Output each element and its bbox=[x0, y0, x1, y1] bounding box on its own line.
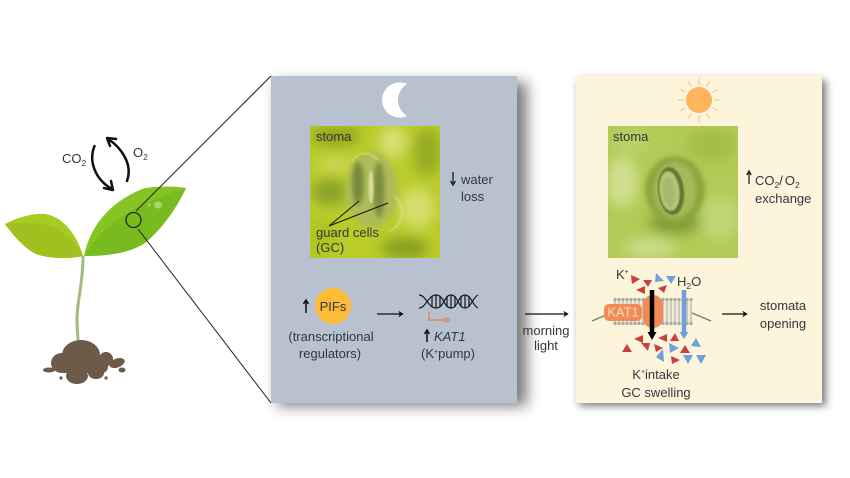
label: stoma: stoma bbox=[613, 129, 649, 144]
label: K+ intake, GC swelling: intake bbox=[645, 367, 680, 382]
label: H2O: O bbox=[691, 274, 701, 289]
PIFs group: regulators) bbox=[299, 346, 361, 361]
arrow: morning light bbox=[525, 313, 568, 315]
potassium arrow bbox=[650, 290, 654, 333]
effect: CO2/O2 exchange: CO bbox=[755, 173, 774, 188]
label: K+: K bbox=[616, 267, 625, 282]
label: K+: + bbox=[625, 269, 629, 276]
label: K+ intake, GC swelling: K bbox=[632, 367, 641, 382]
effect: CO2/O2 exchange: 2 bbox=[795, 180, 800, 190]
water molecules bbox=[655, 273, 706, 364]
soil mound bbox=[43, 340, 126, 384]
channel bbox=[643, 295, 663, 328]
lipid bilayer bbox=[613, 300, 692, 324]
effect: CO2/O2 exchange: exchange bbox=[755, 191, 811, 206]
icon: transcription arrow bbox=[429, 312, 449, 322]
label: guard cells: (GC) bbox=[316, 240, 344, 255]
PIFs group bbox=[288, 288, 374, 361]
label: H2O: H bbox=[677, 274, 686, 289]
guard cell pointer lines bbox=[329, 201, 388, 226]
icon: DNA bbox=[419, 295, 478, 308]
zoom lines from leaf to night panel bbox=[136, 76, 271, 403]
effect: water loss: loss bbox=[461, 189, 485, 204]
zoom circle on leaf bbox=[126, 212, 141, 228]
PIFs group: (transcriptional bbox=[288, 329, 374, 344]
right leaf bbox=[84, 186, 186, 256]
label: guard cells: guard cells bbox=[316, 225, 379, 240]
stem bbox=[77, 256, 83, 360]
plant illustration bbox=[5, 186, 186, 384]
label: CO2: 2 bbox=[82, 158, 86, 168]
icon: moon bbox=[382, 82, 407, 118]
label: O2: O bbox=[133, 145, 143, 160]
panel: night bbox=[271, 76, 527, 406]
label: stoma: stoma bbox=[316, 129, 352, 144]
effect: water loss bbox=[450, 172, 493, 204]
label: stomata opening: opening bbox=[760, 316, 806, 331]
membrane anchor lines bbox=[592, 313, 711, 321]
KAT1 label bbox=[421, 329, 475, 361]
KAT1 label: KAT1 bbox=[434, 329, 466, 344]
KAT1 label: (K bbox=[421, 346, 434, 361]
KAT1 label: pump) bbox=[438, 346, 475, 361]
left leaf bbox=[5, 214, 83, 258]
label: morning light: morning bbox=[523, 323, 569, 338]
label: stomata opening: stomata bbox=[760, 298, 807, 313]
label: K+ intake, GC swelling: GC swelling bbox=[621, 385, 691, 400]
KAT1 label: + bbox=[434, 349, 438, 356]
potassium ions bbox=[622, 275, 690, 364]
effect: CO2/O2 exchange: / bbox=[779, 173, 783, 188]
night stoma micrograph bbox=[308, 126, 441, 258]
effect: water loss: water bbox=[460, 172, 493, 187]
membrane diagram bbox=[592, 267, 711, 364]
PIFs group: PIFs bbox=[320, 299, 347, 314]
effect: CO2/O2 exchange: O bbox=[785, 173, 795, 188]
label: K+ intake, GC swelling: + bbox=[641, 369, 645, 376]
effect: CO2/O2 exchange: 2 bbox=[774, 180, 780, 190]
KAT1 box bbox=[604, 304, 642, 321]
water arrow bbox=[682, 290, 686, 333]
water droplet bbox=[154, 202, 162, 208]
arrow: PIFs to KAT1 bbox=[377, 313, 403, 315]
effect: CO2/O2 exchange bbox=[747, 171, 811, 206]
label: CO2: CO bbox=[62, 151, 82, 166]
label: K+ intake, GC swelling bbox=[621, 367, 691, 400]
label: morning light: light bbox=[534, 338, 558, 353]
gas exchange arrows bbox=[92, 138, 129, 190]
arrow: to stomata opening bbox=[722, 313, 747, 315]
day stoma micrograph bbox=[606, 126, 740, 258]
membrane diagram: KAT1 bbox=[607, 304, 639, 320]
panel: day bbox=[576, 76, 826, 406]
icon: sun bbox=[678, 79, 720, 121]
label: H2O: 2 bbox=[686, 281, 691, 291]
label: O2: 2 bbox=[143, 152, 148, 162]
